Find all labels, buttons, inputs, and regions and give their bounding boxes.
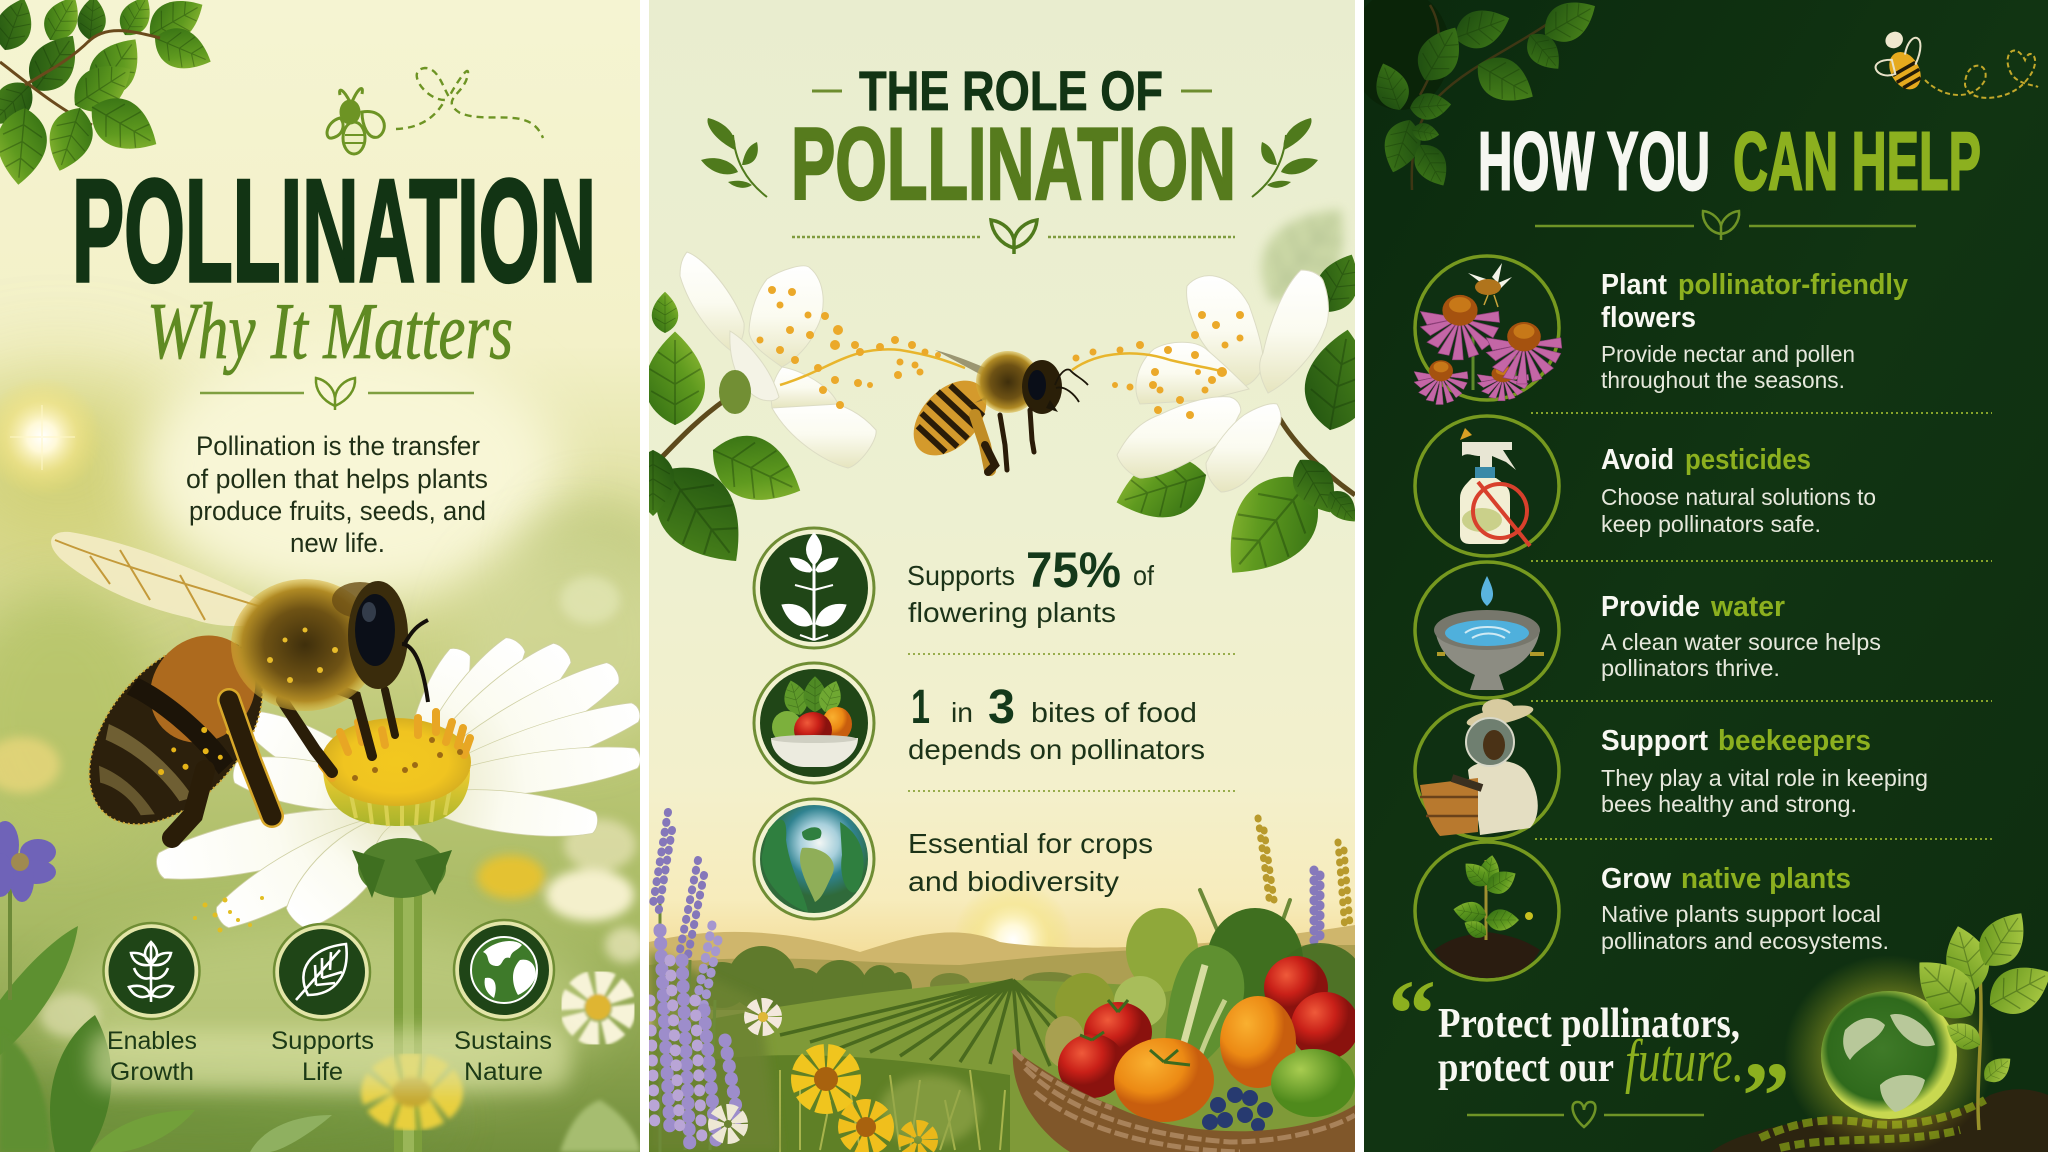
stat text 1: 75% <box>1026 542 1121 598</box>
laurel left <box>701 118 767 197</box>
petals <box>680 252 876 468</box>
benefit: enables growth: Enables <box>107 1027 197 1055</box>
action: support beekeepers: beekeepers <box>1718 725 1871 757</box>
stat text 2: in <box>951 697 973 728</box>
icon: bee with dashed trail <box>1864 22 2038 100</box>
bee head and eye <box>348 581 428 702</box>
action: plant pollinator-friendly flowers: flowers <box>1601 302 1696 334</box>
heading: the role of: THE ROLE OF <box>859 59 1163 122</box>
foreground meadow <box>649 1055 1010 1152</box>
bee thorax <box>231 579 370 711</box>
quote: future. <box>1625 1028 1744 1094</box>
action: provide water: A clean water source helps <box>1601 629 1881 655</box>
action: plant pollinator-friendly flowers <box>1414 256 1908 404</box>
wildflowers <box>716 1005 930 1152</box>
action: avoid pesticides: pesticides <box>1685 444 1811 476</box>
stat rows <box>754 528 1236 919</box>
sun glow <box>0 386 90 486</box>
blurred background flowers <box>0 576 645 1037</box>
action: provide water: Provide <box>1601 591 1700 623</box>
benefit: supports life: Life <box>302 1058 343 1086</box>
action: grow native plants: pollinators and ecosystems. <box>1601 928 1889 954</box>
moss highlights <box>1760 1100 1985 1148</box>
bee legs <box>975 410 1034 472</box>
bee abdomen <box>88 636 264 826</box>
stat: earth icon <box>754 799 874 919</box>
blurred yellow foreground flower <box>376 1068 448 1116</box>
bee wing <box>935 350 1010 405</box>
stat text 1: Supports <box>907 560 1015 591</box>
soil and moss <box>1711 1089 2048 1152</box>
action: support beekeepers <box>1415 699 1928 839</box>
dotted divider with leaf <box>792 220 1235 254</box>
quote divider with heart <box>1467 1102 1704 1127</box>
bee legs <box>172 688 395 838</box>
panel background <box>1364 0 2048 1152</box>
faint leaf <box>1241 186 1370 323</box>
benefit: supports life <box>271 924 374 1086</box>
panel background <box>0 0 680 1152</box>
wicker basket <box>1013 1050 1355 1152</box>
panel: pollination why it matters <box>0 0 680 1152</box>
stat text 2 <box>908 681 1205 765</box>
stat text 1 <box>907 542 1154 628</box>
stat text 3: and biodiversity <box>908 866 1119 897</box>
stat text 2: 3 <box>988 681 1015 734</box>
divider with leaf <box>1535 211 1916 240</box>
icon: outline bee with dashed heart trail <box>327 68 543 154</box>
heading: pollination: POLLINATION <box>791 107 1236 221</box>
action: support beekeepers: bees healthy and strong. <box>1601 791 1857 817</box>
action: provide water <box>1415 562 1881 698</box>
branch <box>649 400 725 470</box>
benefit: sustains nature: Nature <box>464 1058 543 1086</box>
icon row: benefits <box>90 920 570 1090</box>
action: avoid pesticides: Avoid <box>1601 444 1674 476</box>
petals <box>1117 270 1328 492</box>
action: support beekeepers: Support <box>1601 725 1708 757</box>
action: avoid pesticides: keep pollinators safe. <box>1601 511 1821 537</box>
stat text 3 <box>908 828 1153 897</box>
small white daisy <box>572 982 624 1034</box>
description text <box>186 431 488 558</box>
glowing globe <box>1784 955 1994 1152</box>
subtitle: Why It Matters <box>147 288 513 376</box>
leafy branch top left <box>1350 0 1604 193</box>
leafy branch top left <box>0 0 218 187</box>
purple wildflowers left <box>649 812 780 1152</box>
sun glow <box>960 884 1066 947</box>
action: provide water: water <box>1710 591 1785 623</box>
fruit <box>1045 956 1359 1132</box>
stat: food bowl icon <box>754 663 874 783</box>
quote: protect our <box>1438 1045 1614 1091</box>
stat text 2: depends on pollinators <box>908 734 1205 765</box>
right blossom with leaves <box>1108 246 1380 598</box>
lettuce and greens <box>1055 908 1355 1059</box>
purple flower <box>0 821 56 1000</box>
action: plant pollinator-friendly flowers: throughout the seasons. <box>1601 367 1845 393</box>
benefit: enables growth <box>104 923 200 1086</box>
description text: Pollination is the transfer <box>196 431 480 461</box>
quote mark open: “ <box>1388 960 1436 1067</box>
benefit: sustains nature <box>454 920 554 1086</box>
action: grow native plants: Native plants support local <box>1601 901 1881 927</box>
stat text 2: bites of food <box>1031 697 1197 728</box>
stat text 3: Essential for crops <box>908 828 1153 859</box>
crop field <box>649 980 1355 1152</box>
soft label backdrop <box>90 1030 570 1090</box>
title: POLLINATION <box>72 149 596 312</box>
stat text 2: 1 <box>911 681 930 734</box>
basket of vegetables <box>1013 908 1365 1152</box>
quote mark close: ” <box>1742 1042 1790 1149</box>
bee wing <box>51 532 258 626</box>
divider with leaf <box>200 378 474 410</box>
benefit: supports life: Supports <box>271 1027 374 1055</box>
left blossom with leaves <box>632 252 876 584</box>
right wild spikes <box>1198 814 1354 946</box>
dividers <box>1531 413 1992 839</box>
description text: produce fruits, seeds, and <box>189 496 486 526</box>
farm landscape <box>649 812 1365 1152</box>
action: support beekeepers: They play a vital role in keeping <box>1601 765 1928 791</box>
benefit: enables growth: Growth <box>110 1058 194 1086</box>
stat text 1: flowering plants <box>908 597 1116 628</box>
bee abdomen <box>900 367 1000 469</box>
tree line <box>696 946 1072 1010</box>
action: provide water: pollinators thrive. <box>1601 655 1780 681</box>
bottom foliage <box>0 926 640 1152</box>
icon: water basin <box>1415 562 1559 698</box>
action: grow native plants: Grow <box>1601 863 1671 895</box>
icon: coneflowers <box>1414 256 1562 404</box>
panel: how you can help <box>1350 0 2048 1152</box>
icon: seedling in soil <box>1415 842 1559 980</box>
action: plant pollinator-friendly flowers: pollinator-friendly <box>1678 269 1908 301</box>
laurel right <box>1252 118 1318 197</box>
seedling by globe <box>1903 902 2048 1130</box>
panel background <box>649 0 1355 1028</box>
panel: the role of pollination <box>632 0 1380 1152</box>
icon: beekeeper <box>1415 699 1559 839</box>
stat text 1: of <box>1133 560 1154 591</box>
action: grow native plants <box>1415 842 1889 980</box>
honey bee on flower <box>51 532 428 857</box>
action: plant pollinator-friendly flowers: Provide nectar and pollen <box>1601 341 1855 367</box>
daisy flower with stem <box>152 629 646 1152</box>
pollen specks <box>193 896 264 932</box>
bee thorax <box>976 351 1040 413</box>
stat: 75% of flowering plants <box>754 528 874 648</box>
action: plant pollinator-friendly flowers: Plant <box>1601 269 1667 301</box>
icon: crossed spray bottle <box>1415 416 1559 556</box>
action: avoid pesticides <box>1415 416 1876 556</box>
pollen stream <box>756 286 1244 419</box>
bee head <box>1022 360 1088 414</box>
quote <box>1438 1001 1744 1094</box>
heading: HOW YOU <box>1478 114 1710 208</box>
quote: Protect pollinators, <box>1438 1001 1740 1047</box>
benefit: sustains nature: Sustains <box>454 1027 552 1055</box>
action: avoid pesticides: Choose natural solutions to <box>1601 484 1876 510</box>
description text: of pollen that helps plants <box>186 464 488 494</box>
description text: new life. <box>290 528 385 558</box>
flying bee <box>900 350 1088 472</box>
action: grow native plants: native plants <box>1681 863 1851 895</box>
distant hills <box>649 925 1355 965</box>
